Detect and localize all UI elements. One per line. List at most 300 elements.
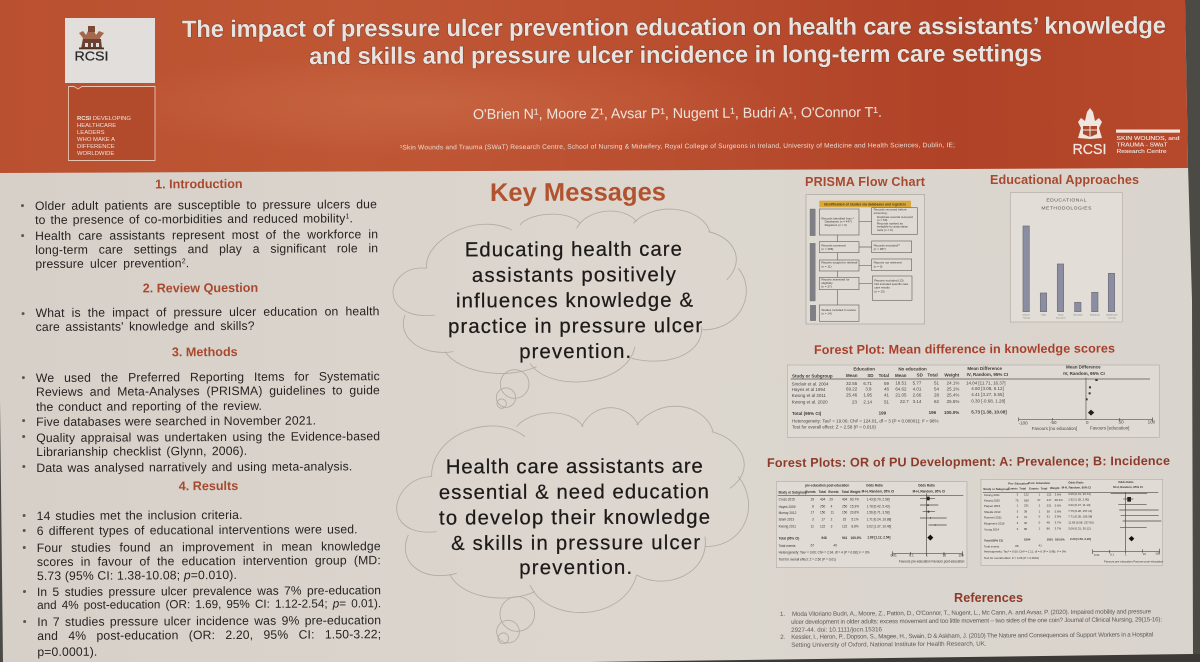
- chart: forest plot A prevalence: Favours pre-education Favours post-education: [899, 560, 965, 564]
- chart: forest plot knowledge: SD: [917, 373, 924, 378]
- chart: forest plot B incidence: 86: [1047, 527, 1050, 531]
- chart: forest plot B incidence: Total events: [984, 544, 1000, 548]
- chart: forest plot A prevalence: post-education: [827, 484, 849, 488]
- chart: forest plot knowledge: 69.22: [846, 387, 858, 392]
- chart: forest plot B incidence: 1: [1125, 552, 1127, 556]
- key message 1 text: prevention.: [519, 341, 631, 363]
- chart: forest plot B incidence: 2: [1039, 503, 1041, 507]
- section: results: [22, 479, 381, 659]
- chart: forest plot B incidence: Young 2014: [984, 527, 1000, 531]
- heading: forest plot mean difference: Forest Plot: Mean difference in knowledge scores: [814, 341, 1115, 357]
- chart: forest plot A prevalence: Total: [819, 490, 826, 494]
- chart: forest plot B incidence: 31: [1047, 515, 1050, 519]
- references list: Moda Vitoriano Budri, A., Moore, Z., Patton, D., O'Connor, T., Nugent, L., Mc Cann, A. and Avsar, P. (2020). Impaired mobility and pressure: [792, 608, 1152, 618]
- section: results: Four studies found an improvement in mean knowledge: [37, 539, 381, 555]
- chart: forest plot knowledge: 3.14: [913, 399, 922, 404]
- chart: forest plot A prevalence: Events: [828, 490, 839, 494]
- chart: forest plot knowledge: 5.77: [913, 381, 922, 386]
- chart: forest plot knowledge: 41: [884, 393, 889, 398]
- chart: educational methodologies bar chart: Workshops: [1090, 314, 1100, 317]
- chart: forest plot A prevalence: 3: [812, 517, 814, 521]
- chart: PRISMA flow diagram: tools (n = 0): [877, 228, 893, 232]
- section: results: and 4% post-education (OR: 2.20, 95% CI: 1.50-3.22;: [37, 627, 381, 643]
- chart: forest plot knowledge: Weight: [944, 373, 960, 378]
- chart: forest plot B incidence: Ruennel 2021: [984, 515, 1002, 519]
- chart: forest plot A prevalence: 15.3%: [850, 505, 859, 509]
- chart: forest plot B incidence: 3.7%: [1055, 527, 1062, 531]
- references list: Kessler, I., Heron, P., Dopson, S., Magee, H., Swain, D & Askham, J. (2010) The Nature and Consequences of Support Workers in a Hospital: [791, 631, 1153, 641]
- chart: forest plot B incidence: Total: [1019, 487, 1026, 491]
- chart: forest plot B incidence: 3: [1017, 515, 1019, 519]
- chart: forest plot B incidence: Total: [1041, 486, 1047, 490]
- chart: forest plot B incidence: 68.2%: [1055, 498, 1063, 502]
- chart: forest plot A prevalence: 100.0%: [851, 536, 862, 540]
- chart: forest plot knowledge: 4.60 [3.08, 6.12]: [971, 386, 1004, 391]
- chart: educational methodologies bar chart: Discussion: [1056, 317, 1065, 319]
- chart: forest plot A prevalence: Total: [842, 490, 849, 494]
- section: review question: care assistants' knowledge and skills?: [36, 319, 255, 334]
- chart: forest plot knowledge: IV, Random, 95% CI: [967, 372, 1008, 377]
- section: methods: Quality appraisal was undertaken using the Evidence-based: [36, 429, 380, 445]
- chart: forest plot B incidence: Total (95% CI): [984, 538, 1003, 542]
- heading: PRISMA flow chart: PRISMA Flow Chart: [805, 175, 926, 189]
- chart: forest plot knowledge: 25.4%: [947, 392, 959, 397]
- chart: forest plot knowledge: 59: [884, 381, 889, 386]
- chart: forest plot knowledge: Sinclair et al. 2004: [792, 381, 829, 386]
- chart: forest plot A prevalence: Total (95% CI): [779, 536, 799, 540]
- chart: forest plot B incidence: 30: [1024, 521, 1028, 525]
- section: review question: What is the impact of pressure ulcer education on health: [36, 304, 380, 320]
- section: review question: 2. Review Question: [143, 281, 258, 295]
- chart: forest plot B incidence: Paquet 2015: [984, 504, 1001, 508]
- chart: PRISMA flow diagram: (n = 50): [877, 218, 887, 222]
- chart: forest plot B incidence: 1: [1017, 504, 1019, 508]
- chart: forest plot B incidence: Odds Ratio: [1068, 481, 1084, 485]
- chart: forest plot A prevalence: 100: [958, 554, 964, 558]
- section: methods: We used the Preferred Reporting Items for Systematic: [36, 369, 380, 385]
- chart: forest plot B incidence: 11.69 [0.58, 237.06]: [1068, 520, 1094, 524]
- logo: RCSI white box: [65, 18, 155, 83]
- chart: PRISMA flow diagram: eligibility: [821, 281, 833, 285]
- chart: forest plot A prevalence: Hayes 2009: [779, 505, 796, 509]
- chart: forest plot A prevalence: Murray 2012: [779, 511, 797, 515]
- chart: forest plot knowledge: 0.30 [-0.68, 1.28]: [971, 399, 1005, 404]
- chart: forest plot B incidence: Pre- Education: [1008, 481, 1029, 485]
- chart: forest plot knowledge: 32.55: [846, 381, 858, 386]
- chart: forest plot A prevalence: 20.6%: [850, 511, 859, 515]
- section: introduction: Health care assistants represent most of the workforce in: [35, 227, 378, 243]
- chart: forest plot A prevalence: 948: [821, 536, 827, 540]
- chart: forest plot A prevalence: 1: [926, 554, 928, 558]
- chart: forest plot knowledge: 4.01: [913, 386, 922, 391]
- chart: forest plot B incidence: 100.0%: [1055, 537, 1065, 541]
- chart: forest plot knowledge: Favours [no education]: [1032, 426, 1077, 431]
- chart: forest plot A prevalence: Kwong 2011: [779, 525, 796, 529]
- chart: forest plot knowledge: 14.04 [11.71, 16.37]: [966, 380, 1006, 385]
- section: introduction: [21, 177, 378, 271]
- chart: forest plot knowledge: IV, Random, 95% CI: [1063, 371, 1105, 376]
- chart: forest plot B incidence: Heterogeneity: Tau² = 0.00; Chi² = 1.11, df = 6 (P = 0.98); I² = 0%: [984, 550, 1067, 554]
- chart: forest plot knowledge: 51: [884, 399, 889, 404]
- chart: forest plot knowledge: Total: [927, 373, 938, 378]
- chart: forest plot A prevalence: 15: [843, 517, 846, 521]
- chart: forest plot knowledge: 51: [934, 381, 939, 386]
- chart: forest plot A prevalence: 11: [811, 524, 814, 528]
- authors: O'Brien N¹, Moore Z¹, Avsar P¹, Nugent L¹, Budri A¹, O'Connor T¹.: [473, 105, 882, 123]
- chart: forest plot A prevalence: 4: [831, 505, 833, 509]
- section: results: 5.73 (95% CI: 1.38-10.08; p=0.010).: [37, 568, 237, 583]
- chart: forest plot B incidence: 75: [1015, 498, 1019, 502]
- chart: PRISMA flow diagram: Studies included in review: [821, 308, 857, 312]
- chart: forest plot A prevalence: 122: [842, 524, 848, 528]
- cloud 2: essential: [397, 406, 749, 644]
- title: and skills and pressure ulcer incidence in long-term care settings: [309, 40, 1042, 70]
- heading: references: References: [954, 591, 1023, 605]
- chart: forest plot A prevalence: Total events: [779, 544, 796, 548]
- chart: forest plot B incidence: 41: [1039, 544, 1042, 548]
- chart: forest plot knowledge: Hayes et al 1994: [792, 387, 826, 392]
- chart: PRISMA flow diagram: (n = 27): [821, 285, 832, 289]
- logo: SWaT research centre: SKIN WOUNDS, and: [1116, 136, 1180, 142]
- chart: forest plot knowledge: 22.7: [900, 399, 909, 404]
- chart: forest plot B incidence: 122: [1047, 492, 1052, 496]
- heading: key messages: Key Messages: [490, 178, 666, 207]
- key message 1 text: assistants positively: [472, 264, 677, 287]
- chart: forest plot B incidence: 0.1: [1110, 552, 1114, 556]
- section: introduction: long-term care settings and play a significant role in: [35, 241, 378, 257]
- chart: forest plot knowledge: -100: [1019, 420, 1028, 425]
- chart: forest plot B incidence: 1.92 [1.28, 2.90]: [1068, 498, 1089, 502]
- chart: forest plot knowledge: 24.1%: [947, 381, 959, 386]
- key message 2 text: Health care assistants are: [446, 456, 703, 478]
- chart: forest plot B incidence: 638: [1024, 498, 1029, 502]
- chart: forest plot A prevalence: 250: [842, 505, 848, 509]
- chart: forest plot B incidence: M-H, Random, 95% CI: [1062, 486, 1091, 490]
- chart: PRISMA flow diagram: (n = 387): [874, 247, 886, 251]
- chart: PRISMA flow diagram: Records screened: [821, 243, 846, 247]
- chart: forest plot B incidence: 3: [1017, 493, 1019, 497]
- chart: forest plot knowledge: [787, 365, 1159, 437]
- chart: forest plot A prevalence: 29: [811, 497, 814, 501]
- chart: PRISMA flow diagram: ineligible by automation: [877, 225, 909, 229]
- chart: educational methodologies bar chart: Learning: [1108, 316, 1116, 319]
- chart: forest plot knowledge: 196: [929, 410, 937, 415]
- chart: forest plot knowledge: 25.46: [846, 393, 858, 398]
- logo: SWaT research centre: [1072, 108, 1180, 158]
- chart: forest plot B incidence: 1: [1039, 492, 1041, 496]
- chart: forest plot A prevalence: Heterogeneity: Tau² = 0.00; Chi² = 2.34, df = 4 (P = 0.68); I² = 0%: [779, 551, 870, 555]
- chart: PRISMA flow diagram: screening:: [874, 211, 888, 215]
- chart: forest plot knowledge: Education: [853, 367, 875, 372]
- chart: forest plot knowledge: 5.73 [1.38, 10.08]: [971, 410, 1007, 415]
- chart: educational methodologies bar chart: Video: [1041, 315, 1047, 317]
- chart: forest plot knowledge: 100.0%: [944, 410, 959, 415]
- chart: forest plot B incidence: 3.6%: [1055, 492, 1062, 496]
- chart: forest plot A prevalence: 5.1%: [851, 517, 859, 521]
- chart: forest plot knowledge: 25.5%: [947, 399, 959, 404]
- chart: forest plot A prevalence: 0.1: [909, 554, 914, 558]
- chart: forest plot B incidence: 38: [1024, 510, 1028, 514]
- section: methods: Data was analysed narratively and using meta-analysis.: [36, 459, 352, 475]
- chart: forest plot B incidence: 0: [1039, 521, 1041, 525]
- chart: forest plot A prevalence: M-H, Random, 95% CI: [862, 490, 894, 494]
- chart: forest plot A prevalence: pre-education: [805, 484, 826, 488]
- icon: white crest: [1078, 108, 1102, 139]
- chart: forest plot knowledge: Mean: [895, 373, 907, 378]
- chart: PRISMA flow diagram: Reports excluded (13): [874, 279, 904, 283]
- chart: forest plot knowledge: No education: [898, 367, 927, 372]
- chart: PRISMA flow diagram: (n = 13): [874, 289, 885, 293]
- chart: PRISMA flow diagram: (n = 398): [821, 247, 833, 251]
- chart: forest plot B incidence: Events: [1008, 487, 1018, 491]
- chart: forest plot B incidence: Events: [1029, 486, 1039, 490]
- chart: educational methodologies bar chart: EDUCATIONAL: [1046, 197, 1087, 203]
- chart: forest plot A prevalence: 250: [820, 505, 826, 509]
- chart: PRISMA flow diagram: (n = 11): [821, 264, 831, 268]
- chart: PRISMA flow diagram: Records excluded**: [874, 243, 901, 247]
- chart: forest plot knowledge: Total (95% CI): [792, 411, 822, 416]
- references list: 1.: [780, 611, 785, 618]
- chart: forest plot B incidence: 88: [1015, 544, 1019, 548]
- chart: forest plot knowledge: 54: [934, 386, 939, 391]
- chart: forest plot B incidence: 1001: [1047, 537, 1053, 541]
- chart: forest plot A prevalence: 11: [831, 511, 834, 515]
- chart: forest plot A prevalence: Weight: [850, 490, 861, 494]
- chart: forest plot knowledge: Heterogeneity: Tau² = 19.06; Chi² = 124.01, df = 3 (P < 0.00001); I² = 98%: [792, 419, 939, 424]
- chart: forest plot B incidence: 417: [1047, 498, 1052, 502]
- chart: forest plot B incidence: [981, 479, 1164, 565]
- chart: forest plot A prevalence: 122: [820, 524, 826, 528]
- chart: forest plot knowledge: Study or Subgroup: [792, 374, 833, 379]
- chart: PRISMA flow diagram: Registers (n = 0): [825, 223, 847, 227]
- chart: forest plot B incidence: 231: [1024, 504, 1029, 508]
- section: review question: [22, 281, 380, 334]
- chart: forest plot A prevalence: Cross 2015: [779, 498, 795, 502]
- heading: forest plots OR of PU development: Forest Plots: OR of PU Development: A: Prevalence; B: Incidence: [767, 454, 1170, 470]
- chart: PRISMA flow diagram: Reports sought for retrieval: [821, 261, 858, 265]
- chart: forest plot B incidence: 3.06 [0.31, 30.12]: [1068, 526, 1091, 530]
- chart: forest plot A prevalence: 1.78 [0.42, 5.43]: [867, 505, 890, 509]
- chart: forest plot B incidence: Shields 2013: [984, 510, 1001, 514]
- chart: forest plot knowledge: Mean: [846, 373, 858, 378]
- chart: forest plot A prevalence: 404: [842, 497, 848, 501]
- chart: forest plot B incidence: 231: [1047, 503, 1052, 507]
- chart: forest plot B incidence: 31: [1024, 515, 1028, 519]
- chart: forest plot A prevalence: M-H, Random, 95% CI: [913, 489, 945, 493]
- section: results: In 5 studies pressure ulcer prevalence was 7% pre-education: [37, 583, 381, 599]
- chart: educational methodologies bar chart: Didactic: [1023, 314, 1030, 317]
- chart: forest plot B incidence: Mogensen 2016: [984, 521, 1005, 525]
- chart: forest plot knowledge: 64.62: [895, 386, 907, 391]
- chart: forest plot A prevalence: 3.02 [1.37, 10.46]: [867, 524, 891, 528]
- chart: forest plot B incidence: 10: [1143, 552, 1146, 556]
- chart: forest plot knowledge: Favours [education]: [1090, 425, 1129, 430]
- chart: forest plot B incidence: 2.20 [1.50, 3.22]: [1070, 537, 1091, 541]
- key message 2 text: [439, 456, 710, 579]
- chart: educational methodologies bar chart: Self-directed: [1106, 314, 1117, 317]
- chart: PRISMA flow diagram: Reports assessed for: [821, 278, 850, 282]
- chart: forest plot B incidence: 3: [1017, 521, 1019, 525]
- chart: forest plot B incidence: 3.7%: [1055, 521, 1062, 525]
- section: introduction: Older adult patients are susceptible to pressure ulcers due: [35, 197, 377, 213]
- references list: ulcer development in older adults: excess movement and too little movement – two sides of the one coin? Journal of Clinical Nursing, 29(15-16):: [791, 616, 1162, 626]
- chart: forest plot A prevalence: 8.8%: [851, 524, 859, 528]
- chart: PRISMA flow diagram: [806, 195, 925, 324]
- chart: forest plot A prevalence: 2: [831, 517, 833, 521]
- chart: forest plot B incidence: M-H, Random, 95% CI: [1113, 485, 1143, 489]
- chart: forest plot knowledge: 6.71: [863, 381, 873, 386]
- section: results: 14 studies met the inclusion criteria.: [37, 508, 243, 523]
- chart: forest plot A prevalence: Odds Ratio: [918, 483, 935, 487]
- chart: forest plot B incidence: 3: [1017, 510, 1019, 514]
- chart: forest plot A prevalence: Events: [805, 490, 816, 494]
- chart: forest plot knowledge: 25.1%: [947, 386, 959, 391]
- chart: forest plot A prevalence: Study or Subgroup: [778, 490, 807, 494]
- chart: PRISMA flow diagram: (n = 14): [821, 312, 832, 316]
- chart: PRISMA flow diagram: Not included specific care: [874, 282, 909, 286]
- chart: forest plot B incidence: 5.9%: [1055, 515, 1062, 519]
- chart: forest plot knowledge: -50: [1050, 420, 1057, 425]
- chart: forest plot A prevalence: 150: [820, 511, 826, 515]
- chart: forest plot B incidence: Odds Ratio: [1118, 480, 1134, 484]
- chart: forest plot knowledge: 21.05: [895, 392, 907, 397]
- key message 2 text: to develop their knowledge: [439, 507, 710, 529]
- chart: educational methodologies bar chart: Group: [1058, 314, 1064, 317]
- chart: forest plot B incidence: 37: [1037, 498, 1041, 502]
- chart: forest plot B incidence: Kwong 2020: [984, 499, 1000, 503]
- logo: RCSI white box: RCSI: [74, 50, 108, 64]
- chart: forest plot knowledge: 23: [852, 399, 857, 404]
- logo: RCSI tagline box: DIFFERENCE: [77, 144, 115, 150]
- chart: forest plot A prevalence: 8: [812, 505, 814, 509]
- section: introduction: to the presence of co-morbidities and reduced mobility1.: [35, 211, 353, 227]
- logo: RCSI tagline box: LEADERS: [77, 130, 105, 136]
- affiliation: ¹Skin Wounds and Trauma (SWaT) Research Centre, School of Nursing & Midwifery, Royal College of Surgeons in Ireland, University of Medicine and Health Sciences, Dublin, IE;: [400, 142, 955, 151]
- logo: SWaT research centre: RCSI: [1072, 141, 1106, 158]
- chart: educational methodologies bar chart: [1010, 193, 1122, 322]
- chart: forest plot knowledge: 199: [879, 410, 887, 415]
- section: results: p=0.0001).: [37, 645, 97, 659]
- chart: forest plot knowledge: 0: [1086, 420, 1089, 425]
- chart: forest plot B incidence: Post- Education: [1028, 481, 1050, 485]
- chart: forest plot A prevalence: 17: [821, 517, 825, 521]
- chart: forest plot knowledge: Mean Difference: [967, 366, 1002, 371]
- logo: RCSI tagline box: HEALTHCARE: [77, 123, 116, 129]
- chart: PRISMA flow diagram: Databases (n = 447): [825, 220, 852, 224]
- key message 2 text: & skills in pressure ulcer: [451, 532, 700, 555]
- chart: PRISMA flow diagram: Reports not retrieved: [874, 261, 902, 265]
- title: [182, 12, 1166, 71]
- chart: PRISMA flow diagram: care results: [874, 285, 890, 289]
- chart: forest plot A prevalence: 10: [943, 554, 946, 558]
- chart: forest plot knowledge: 46: [884, 387, 889, 392]
- references list: 2.: [780, 634, 786, 641]
- chart: forest plot A prevalence: 941: [842, 536, 848, 540]
- chart: forest plot knowledge: 1.95: [863, 393, 873, 398]
- chart: forest plot A prevalence: Islam 2013: [779, 518, 794, 522]
- icon: crest: [79, 26, 104, 49]
- chart: forest plot B incidence: 1: [1039, 509, 1041, 513]
- chart: forest plot knowledge: 28: [934, 392, 939, 397]
- chart: educational methodologies bar chart: Simulation: [1073, 314, 1083, 317]
- chart: forest plot A prevalence: 17: [811, 511, 814, 515]
- chart: forest plot A prevalence: 3: [831, 524, 833, 528]
- chart: forest plot B incidence: 100: [1155, 552, 1160, 556]
- section: results: 4. Results: [179, 479, 238, 493]
- chart: forest plot knowledge: Kwong et al. 2020: [792, 400, 828, 405]
- references list: Setting University of Oxford, National Institute for Health Research, UK.: [791, 641, 987, 649]
- key message 1 text: influences knowledge &: [456, 290, 694, 312]
- chart: forest plot knowledge: 2.66: [913, 392, 922, 397]
- chart: PRISMA flow diagram: Records removed before: [874, 208, 907, 212]
- key message 1 text: Educating health care: [465, 239, 682, 261]
- chart: educational methodologies bar chart: Training: [1023, 316, 1030, 319]
- chart: forest plot B incidence: 5.6%: [1055, 503, 1062, 507]
- chart: forest plot knowledge: 3.8: [865, 387, 872, 392]
- logo: SWaT research centre: Research Centre: [1116, 149, 1166, 155]
- chart: forest plot knowledge: Total: [879, 373, 889, 378]
- chart: forest plot B incidence: 122: [1024, 493, 1029, 497]
- chart: PRISMA flow diagram: Duplicate records removed: [877, 215, 913, 219]
- section: results: In 7 studies pressure ulcer incidence was 9% pre-education: [37, 613, 381, 629]
- header banner: [65, 12, 1180, 161]
- chart: forest plot A prevalence: 1.71 [0.24, 10.88]: [867, 517, 891, 521]
- chart: forest plot B incidence: Kwong 2011: [984, 493, 1000, 497]
- chart: forest plot B incidence: 48: [1047, 521, 1050, 525]
- chart: forest plot A prevalence: 1.43 [0.79, 2.58]: [867, 497, 890, 501]
- section: methods: Reviews and Meta-Analyses (PRISMA) guidelines to guide: [36, 383, 380, 399]
- chart: PRISMA flow diagram: Records identified from:*: [821, 216, 855, 220]
- chart: forest plot B incidence: 7.75 [0.28, 157.14]: [1068, 509, 1092, 513]
- chart: forest plot B incidence: 7.71 [0.38, 156.38]: [1068, 514, 1092, 518]
- logo: RCSI tagline box: RCSI DEVELOPING: [77, 116, 131, 122]
- chart: forest plot B incidence: 86: [1024, 527, 1028, 531]
- chart: forest plot knowledge: 2.14: [863, 399, 873, 404]
- chart: forest plot B incidence: Study or Subgroup: [983, 487, 1009, 491]
- section: methods: Librarianship checklist (Glynn, 2006).: [36, 444, 247, 459]
- chart: forest plot A prevalence: [776, 482, 967, 568]
- section: introduction: pressure ulcer prevention2.: [35, 256, 189, 271]
- chart: forest plot A prevalence: 0.01: [891, 554, 897, 558]
- chart: forest plot A prevalence: 404: [820, 497, 826, 501]
- chart: forest plot B incidence: 3.05 [0.31, 29.74]: [1068, 492, 1091, 496]
- key message 2 text: essential & need education: [439, 481, 709, 504]
- references list: 2927-44. doi: 10.1111/jocn.15316: [791, 626, 883, 634]
- chart: forest plot knowledge: 50: [1119, 420, 1124, 425]
- chart: forest plot knowledge: Test for overall effect: Z = 2.58 (P = 0.010): [792, 425, 876, 430]
- section: methods: [22, 345, 380, 475]
- chart: forest plot B incidence: 38: [1047, 509, 1050, 513]
- logo: RCSI tagline box: WHO MAKE A: [77, 137, 115, 143]
- chart: forest plot A prevalence: 29: [829, 497, 833, 501]
- key message 1 text: [448, 239, 702, 363]
- chart: forest plot knowledge: Kwong et al 2011: [792, 393, 826, 398]
- heading: educational approaches: Educational Approaches: [990, 173, 1139, 187]
- chart: forest plot knowledge: 100: [1148, 419, 1156, 424]
- chart: forest plot A prevalence: 1.69 [1.12, 2.54]: [867, 536, 890, 540]
- chart: forest plot B incidence: Favours pre-education Favours post-education: [1104, 560, 1164, 564]
- chart: PRISMA flow diagram: (n = 0): [874, 264, 882, 268]
- section: methods: 3. Methods: [172, 345, 238, 359]
- chart: forest plot A prevalence: Odds Ratio: [866, 484, 883, 488]
- chart: forest plot knowledge: SD: [867, 373, 874, 378]
- logo: RCSI tagline box: [68, 86, 155, 160]
- chart: forest plot B incidence: 3: [1017, 527, 1019, 531]
- chart: forest plot B incidence: 0: [1039, 515, 1041, 519]
- section: results: scores in favour of the education intervention group (MD:: [37, 553, 381, 569]
- chart: forest plot A prevalence: 60.7%: [850, 497, 859, 501]
- chart: forest plot knowledge: 62: [934, 399, 939, 404]
